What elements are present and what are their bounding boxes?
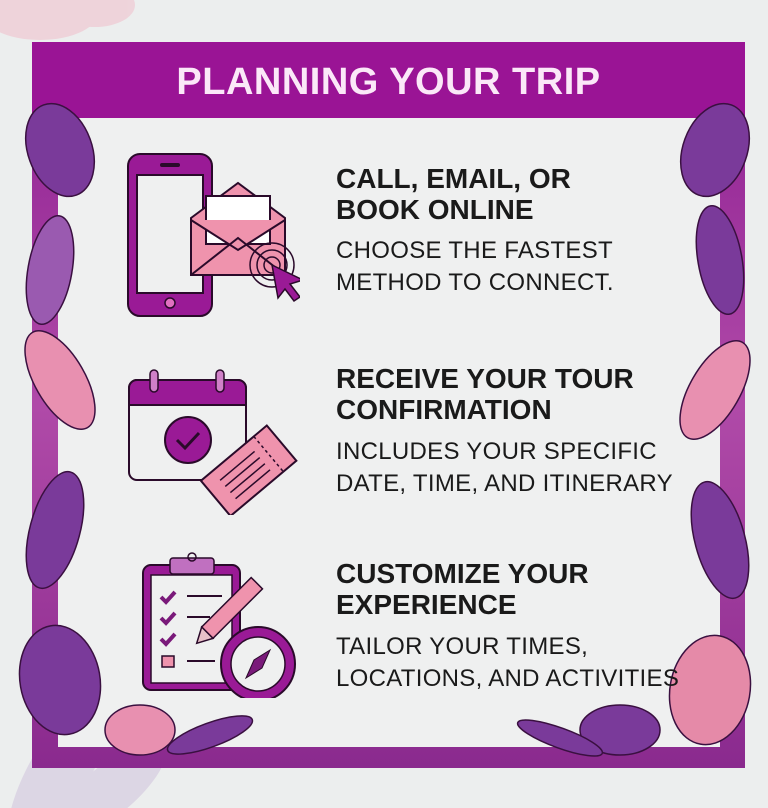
step 1 text: BOOK ONLINE bbox=[336, 194, 534, 225]
step 2 text: RECEIVE YOUR TOUR bbox=[336, 363, 634, 394]
icon: clipboard and compass bbox=[142, 552, 296, 698]
icon: phone and email bbox=[127, 153, 300, 317]
step 3 text: TAILOR YOUR TIMES, bbox=[336, 633, 588, 660]
step 3 text bbox=[336, 558, 679, 692]
step 2 text: CONFIRMATION bbox=[336, 394, 552, 425]
step 1 text: METHOD TO CONNECT. bbox=[336, 269, 614, 296]
step 1 text bbox=[336, 163, 614, 296]
step 3 text: EXPERIENCE bbox=[336, 589, 516, 620]
step 2 text bbox=[336, 363, 673, 497]
icon: calendar and ticket bbox=[128, 369, 298, 515]
step 1 text: CALL, EMAIL, OR bbox=[336, 163, 571, 194]
step 3 text: CUSTOMIZE YOUR bbox=[336, 558, 589, 589]
step 3 text: LOCATIONS, AND ACTIVITIES bbox=[336, 665, 679, 692]
step 2 text: INCLUDES YOUR SPECIFIC bbox=[336, 438, 657, 465]
step 2 text: DATE, TIME, AND ITINERARY bbox=[336, 470, 673, 497]
step 1 text: CHOOSE THE FASTEST bbox=[336, 237, 613, 264]
title: PLANNING YOUR TRIP bbox=[176, 61, 601, 103]
